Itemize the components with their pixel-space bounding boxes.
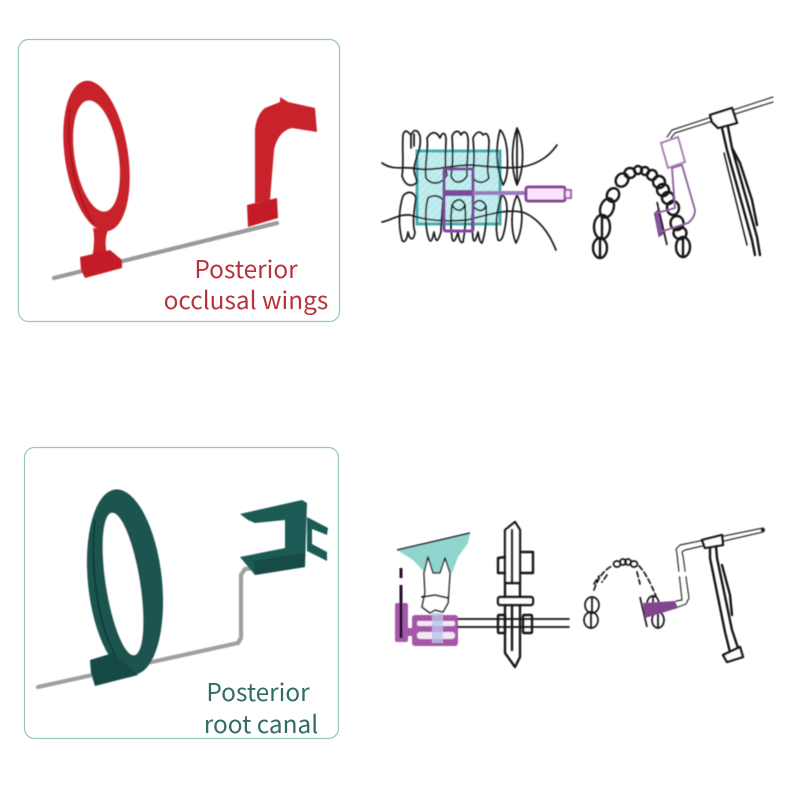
film stop: [395, 603, 408, 642]
panel: posterior occlusal wings product: [18, 40, 340, 322]
label: Posterior occlusal wings: occlusal wings: [164, 282, 328, 317]
bracket: [240, 500, 307, 575]
bite arm: [255, 97, 317, 203]
upper teeth: [402, 128, 523, 185]
holder head and handle: [710, 108, 760, 255]
icon: green film holder: [38, 486, 328, 687]
label: Posterior occlusal wings: Posterior: [194, 251, 298, 286]
diagram: root canal placement on tooth: [395, 522, 569, 667]
diagram: occlusal wing placement on teeth: [382, 128, 571, 250]
purple block: [661, 137, 685, 168]
cyan film wedge: [397, 533, 470, 573]
green aiming ring: [78, 486, 172, 678]
purple holder: [643, 601, 678, 618]
metal rod: [54, 223, 277, 278]
ring stem: [92, 228, 108, 258]
dental arch: [584, 559, 664, 628]
ring block: [90, 653, 138, 686]
label: Posterior root canal: root canal: [204, 706, 318, 741]
purple handle: [526, 187, 565, 201]
ring block: [80, 250, 122, 278]
label: Posterior root canal: Posterior: [206, 674, 310, 709]
purple holder: [444, 169, 473, 231]
bracket prongs: [307, 517, 328, 561]
side holder profile: [498, 522, 533, 667]
gum lines: [382, 145, 557, 169]
red aiming ring: [54, 76, 139, 236]
holder head and handle: [702, 535, 743, 662]
diagram: occlusal wing placement on dental arch: [593, 97, 773, 258]
tooth: [422, 557, 450, 613]
purple holder arm: [657, 165, 695, 232]
bent rod: [676, 528, 763, 607]
film: [656, 213, 663, 234]
lower teeth: [399, 192, 522, 243]
bent metal rod: [38, 568, 254, 687]
cyan film square: [417, 151, 500, 224]
icon: red film holder: [54, 76, 317, 278]
right block: [247, 198, 278, 227]
film line: [640, 597, 647, 627]
double rod: [458, 619, 569, 627]
panel: posterior root canal product: [24, 448, 338, 741]
purple block: [412, 615, 458, 646]
diagram: root canal placement on dental arch: [584, 528, 765, 662]
dental arch: [593, 166, 690, 258]
metal rod: [667, 97, 773, 138]
